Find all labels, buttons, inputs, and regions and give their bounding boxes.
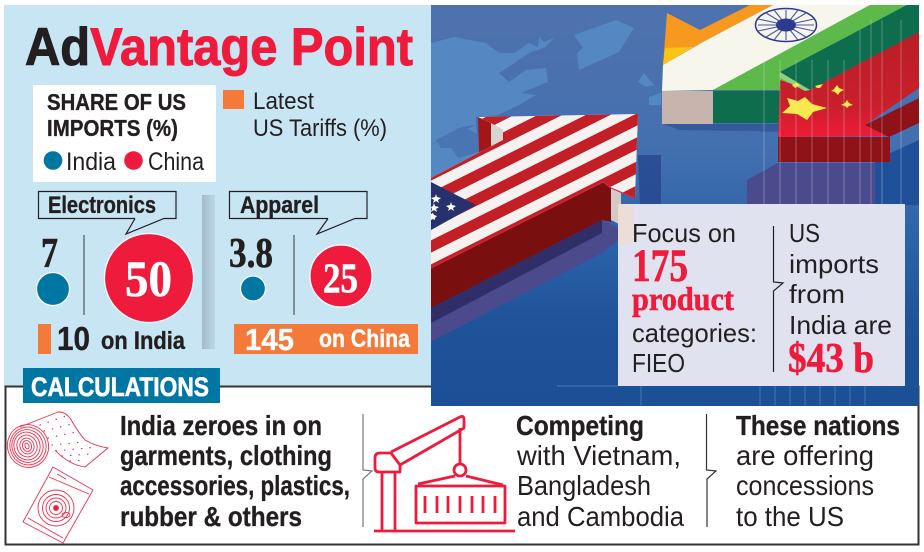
legend: latest US tariffs: Latest [253,88,314,115]
text: US imports from India are $43 b: from [789,279,845,309]
text: these nations [736,410,900,532]
text: US imports from India are $43 b: India are [789,310,892,340]
divider with notch [706,414,716,527]
text: US imports from India are $43 b: $43 b [788,336,874,382]
text: competing with Vietnam: and Cambodia [517,501,684,532]
heading: calculations: CALCULATIONS [31,372,209,402]
Ashoka chakra [756,8,816,42]
arrow: US flag [431,114,638,342]
image: flags and arrows illustration [425,0,919,406]
text: these nations: concessions [736,470,874,501]
panel: calculations box [6,386,918,544]
lower light strip [557,386,865,405]
text: these nations: These nations [736,410,900,441]
section: apparel: 3.8 [229,231,273,277]
text: India zeroes in on: India zeroes in on [120,410,322,441]
icon: washing machine [23,467,93,543]
text: focus on 175 product categories: Focus on [632,218,736,248]
text: focus on 175 product categories: product [632,282,734,318]
text: India zeroes in on: rubber & others [120,501,302,532]
legend: share of US imports: SHARE OF US [47,89,186,115]
section: apparel: 145 [245,322,294,357]
text: India zeroes in on [120,410,350,532]
section: apparel [229,192,418,357]
text: India zeroes in on: accessories, plastics, [120,470,350,501]
section: electronics: 7 [41,231,58,277]
legend: latest US tariffs: US Tariffs (%) [253,115,387,142]
text: competing with Vietnam: Bangladesh [517,470,651,501]
section: electronics: on India [101,327,186,355]
central divider bar [202,195,215,349]
section: electronics: 10 [57,320,90,357]
section: apparel: Apparel [240,192,319,219]
legend: latest US tariffs [223,88,387,142]
icon: fabric roll [1,412,108,473]
text: US imports from India are $43 b: imports [789,249,879,279]
text: these nations: are offering [736,440,874,471]
text: competing with Vietnam: Competing [516,410,644,441]
callout: focus and US imports box [618,204,905,386]
text: competing with Vietnam [516,410,684,532]
legend: share of US imports: India [66,148,116,176]
text: US imports from India are $43 b: US [789,218,820,248]
legend: share of US imports [33,85,216,182]
text: these nations: to the US [736,501,844,532]
text: focus on 175 product categories [632,218,757,378]
text: US imports from India are $43 b [788,218,892,382]
arrow: China flag [778,32,919,162]
icon: crane and container [374,416,515,531]
section: apparel: 25 [323,256,358,302]
text: focus on 175 product categories: 175 [632,240,688,292]
text: focus on 175 product categories: FIEO [632,348,685,378]
section: electronics: 50 [125,252,172,308]
section: electronics [36,192,194,357]
section: electronics: Electronics [48,192,156,219]
legend: share of US imports: China [148,148,204,176]
shadow patches [638,155,661,205]
text: India zeroes in on: garments, clothing [120,440,332,471]
divider with notch [363,414,372,527]
map silhouettes [431,20,661,180]
text: competing with Vietnam: with Vietnam, [516,440,681,471]
panel: light blue data panel [4,5,431,387]
text: focus on 175 product categories: categories: [632,318,757,348]
section: apparel: on China [319,325,411,353]
arrow: India flag [662,5,919,132]
legend: share of US imports: IMPORTS (%) [47,115,178,141]
title: AdVantage Point [25,18,413,77]
vertical light lines [764,20,901,205]
